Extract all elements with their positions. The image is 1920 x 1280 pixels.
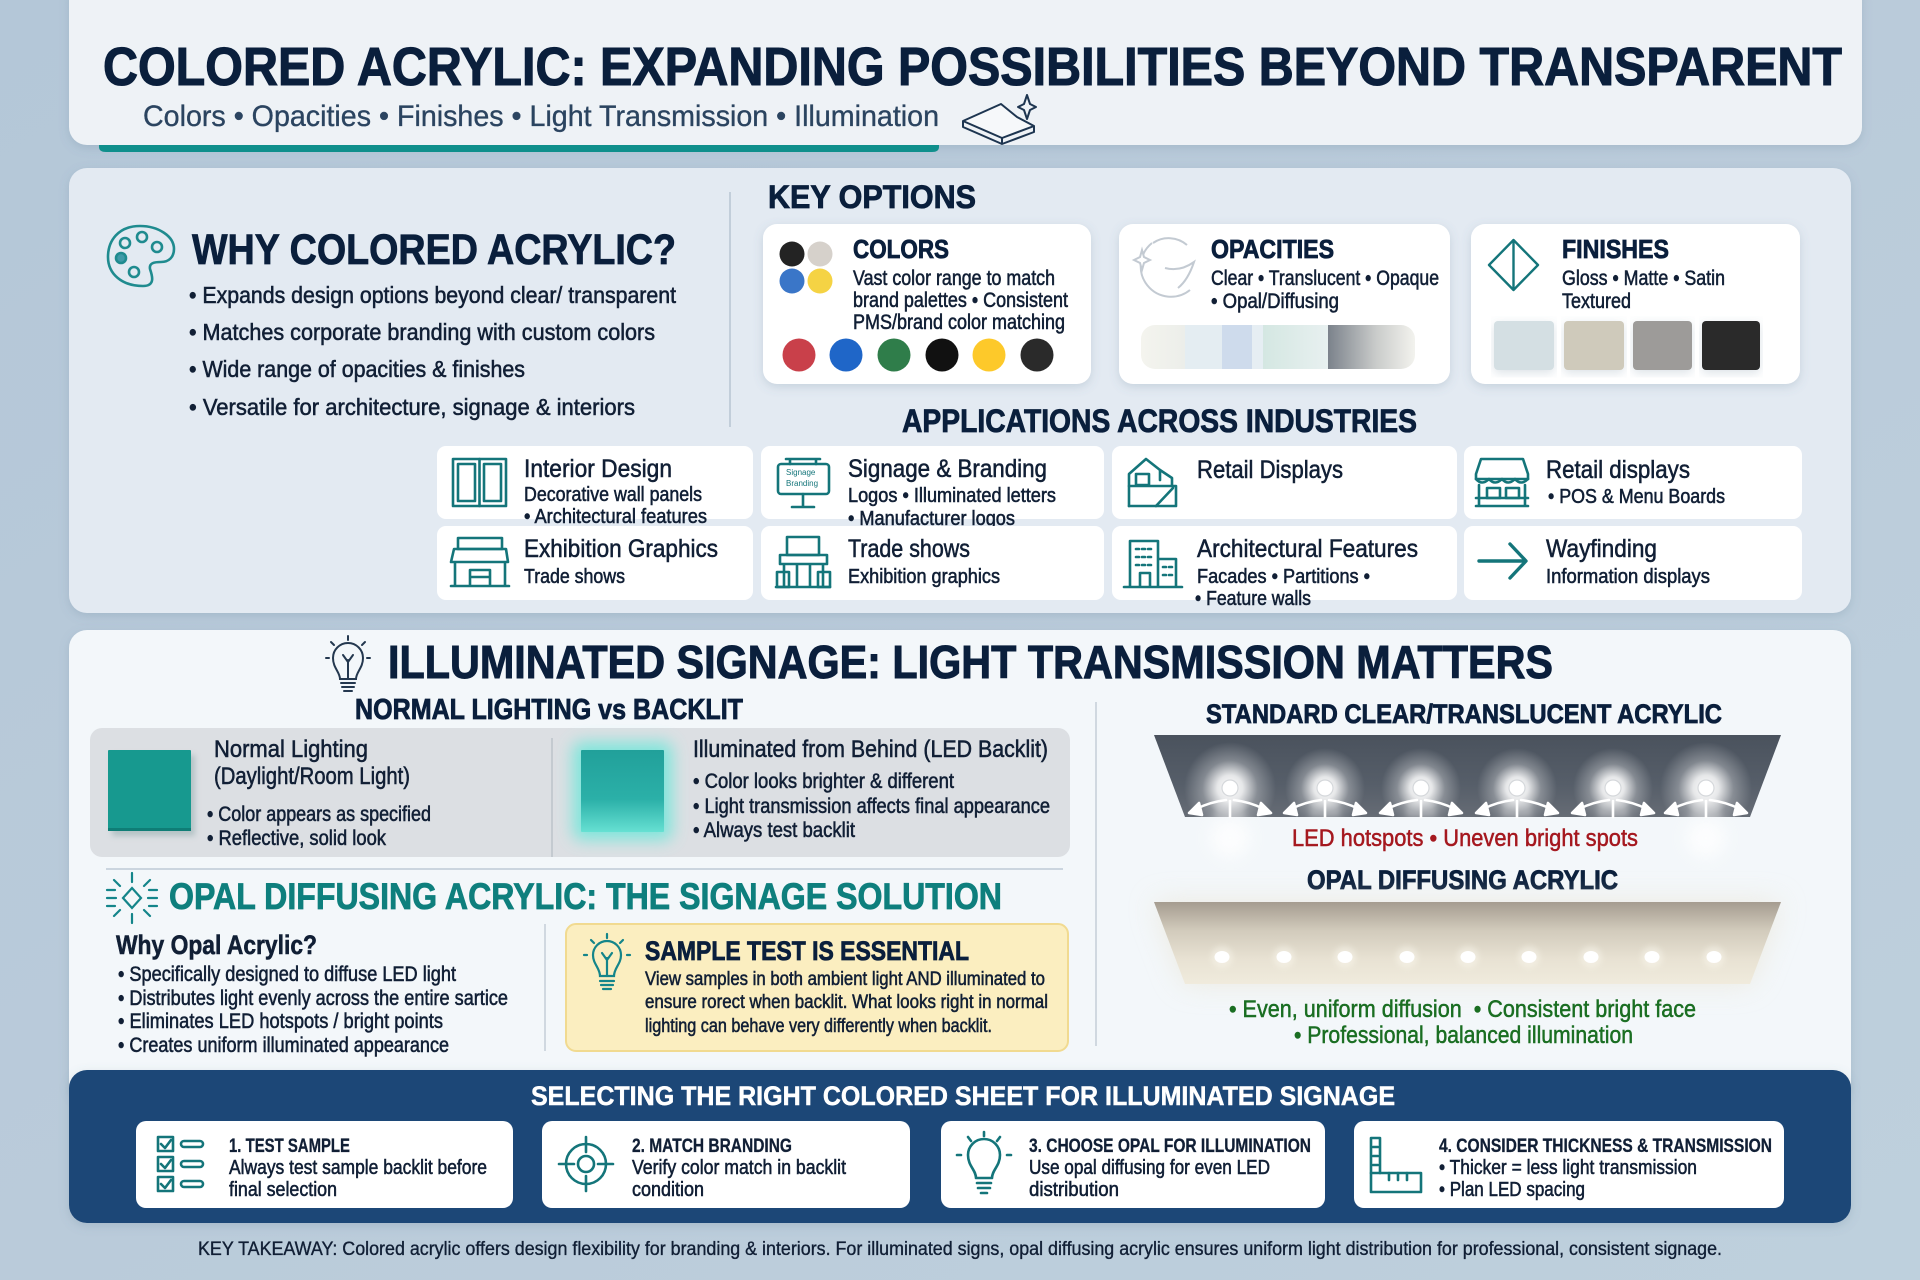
card: wayfinding [1464, 526, 1802, 600]
card: signage and branding [761, 446, 1104, 530]
step: thickness and transmission: • Thicker = less light transmission [1439, 1157, 1697, 1179]
swatch: normal lighting [108, 750, 195, 836]
card: retail displays pos: Retail displays [1546, 456, 1690, 484]
card: opacities: • Opal/Diffusing [1211, 290, 1339, 313]
card: finishes: Gloss • Matte • Satin [1562, 267, 1725, 290]
card: architectural features: Architectural Features [1197, 535, 1418, 563]
step: thickness and transmission: 4. CONSIDER THICKNESS & TRANSMISSION [1439, 1136, 1772, 1157]
diagram: opal diffusion panel [1154, 902, 1781, 984]
comparison: normal vs backlit: • Color looks brighter & different [693, 770, 954, 793]
card: interior design: • Architectural features [524, 506, 707, 528]
card: retail displays pos: • POS & Menu Boards [1548, 486, 1725, 508]
icon: opal sun [107, 873, 157, 923]
step: match branding: condition [632, 1179, 704, 1201]
caption: opal benefits: • Even, uniform diffusion • Consistent bright face [1229, 996, 1696, 1023]
key takeaway: KEY TAKEAWAY: Colored acrylic offers design flexibility for branding & interiors. For illuminated signs, opal diffusing acrylic ensures uniform light distribution for professional, consistent signage. [198, 1239, 1722, 1260]
card: retail displays pos [1464, 446, 1802, 519]
card: signage and branding: Branding [786, 479, 818, 488]
list: reasons: • Wide range of opacities & finishes [189, 356, 525, 382]
card: opacities: Clear • Translucent • Opaque [1211, 267, 1439, 290]
card: architectural features: Facades • Partitions • [1197, 566, 1370, 588]
comparison: normal vs backlit: Normal Lighting [214, 736, 368, 763]
card: colors: PMS/brand color matching [853, 311, 1065, 334]
step: choose opal: distribution [1029, 1179, 1119, 1201]
header panel [69, 0, 1862, 152]
heading: why colored acrylic: WHY COLORED ACRYLIC? [192, 226, 676, 274]
caption: opal benefits: • Professional, balanced illumination [1294, 1022, 1633, 1049]
card: retail displays [1112, 446, 1457, 519]
icon: light bulb [326, 636, 370, 691]
comparison: normal vs backlit: (Daylight/Room Light) [214, 763, 410, 790]
step: match branding [542, 1121, 910, 1208]
card: trade shows [761, 526, 1104, 600]
list: reasons: • Expands design options beyond clear/ transparent [189, 282, 677, 308]
step: thickness and transmission [1354, 1121, 1784, 1208]
heading: opal diffusing acrylic: OPAL DIFFUSING ACRYLIC: THE SIGNAGE SOLUTION [169, 876, 1002, 917]
card: opacities [1119, 224, 1450, 384]
step: thickness and transmission: • Plan LED spacing [1439, 1179, 1585, 1201]
text block: why opal acrylic [116, 930, 508, 1057]
step: match branding: 2. MATCH BRANDING [632, 1136, 792, 1157]
card: interior design: Interior Design [524, 455, 672, 483]
card: exhibition graphics: Trade shows [524, 566, 625, 588]
card: interior design [437, 446, 753, 528]
accent bar [99, 145, 939, 152]
card: architectural features: • Feature walls [1195, 588, 1311, 610]
card: signage and branding: • Manufacturer logos [848, 508, 1015, 530]
callout: sample test: SAMPLE TEST IS ESSENTIAL [645, 936, 969, 966]
heading: normal vs backlit: NORMAL LIGHTING vs BACKLIT [355, 694, 743, 726]
card: colors: Vast color range to match [853, 267, 1055, 290]
step: choose opal: Use opal diffusing for even LED [1029, 1157, 1270, 1179]
heading: opal acrylic: OPAL DIFFUSING ACRYLIC [1307, 865, 1618, 895]
callout: sample test: ensure rorect when backlit. What looks right in normal [645, 992, 1048, 1013]
callout: sample test: lighting can behave very differently when backlit. [645, 1016, 992, 1037]
icon: acrylic sheet [963, 95, 1036, 144]
step: choose opal: 3. CHOOSE OPAL FOR ILLUMINATION [1029, 1136, 1311, 1157]
heading: applications across industries: APPLICATIONS ACROSS INDUSTRIES [902, 403, 1417, 439]
text block: why opal acrylic: • Distributes light evenly across the entire sartice [118, 987, 508, 1010]
comparison: normal vs backlit [90, 728, 1070, 857]
step: test sample: Always test sample backlit before [229, 1157, 487, 1179]
card: colors: brand palettes • Consistent [853, 289, 1068, 312]
card: signage and branding: Signage [786, 468, 816, 477]
comparison: normal vs backlit: Illuminated from Behind (LED Backlit) [693, 736, 1048, 763]
step: test sample: 1. TEST SAMPLE [229, 1136, 350, 1157]
comparison: normal vs backlit: • Always test backlit [693, 819, 855, 842]
list: reasons [189, 282, 677, 420]
diagram: led hotspots panel [1154, 735, 1781, 858]
card: finishes: Textured [1562, 290, 1631, 313]
text block: why opal acrylic: • Creates uniform illuminated appearance [118, 1034, 449, 1057]
callout: sample test [566, 924, 1068, 1051]
card: trade shows: Exhibition graphics [848, 566, 1000, 588]
caption: opal benefits [1229, 996, 1696, 1049]
step: test sample: final selection [229, 1179, 337, 1201]
heading: illuminated signage: ILLUMINATED SIGNAGE: LIGHT TRANSMISSION MATTERS [388, 636, 1553, 688]
card: finishes: FINISHES [1562, 234, 1669, 264]
card: exhibition graphics [437, 526, 753, 600]
card: colors [763, 224, 1091, 384]
card: finishes [1471, 224, 1800, 384]
card: architectural features [1112, 526, 1457, 610]
card: exhibition graphics: Exhibition Graphics [524, 535, 718, 563]
icon: palette [108, 226, 174, 286]
list: reasons: • Matches corporate branding with custom colors [189, 319, 655, 345]
swatch: backlit [573, 742, 672, 840]
callout: sample test: View samples in both ambient light AND illuminated to [645, 969, 1045, 990]
text block: why opal acrylic: • Specifically designed to diffuse LED light [118, 963, 456, 986]
text block: why opal acrylic: • Eliminates LED hotspots / bright points [118, 1010, 443, 1033]
heading: standard acrylic: STANDARD CLEAR/TRANSLUCENT ACRYLIC [1206, 699, 1722, 729]
list: reasons: • Versatile for architecture, signage & interiors [189, 394, 635, 420]
panel: selecting the right sheet [69, 1070, 1851, 1223]
card: interior design: Decorative wall panels [524, 484, 702, 506]
card: colors: COLORS [853, 234, 949, 264]
comparison: normal vs backlit: • Light transmission affects final appearance [693, 795, 1050, 818]
card: signage and branding: Logos • Illuminated letters [848, 485, 1056, 507]
step: choose opal [941, 1121, 1325, 1208]
caption: hotspots: LED hotspots • Uneven bright spots [1292, 825, 1638, 852]
panel: illuminated signage [69, 630, 1851, 1100]
card: signage and branding: Signage & Branding [848, 455, 1047, 483]
heading: key options: KEY OPTIONS [768, 179, 976, 215]
card: retail displays: Retail Displays [1197, 456, 1343, 484]
subtitle: Colors • Opacities • Finishes • Light Transmission • Illumination [143, 100, 939, 133]
text block: why opal acrylic: Why Opal Acrylic? [116, 930, 317, 960]
card: wayfinding: Wayfinding [1546, 535, 1657, 563]
card: trade shows: Trade shows [848, 535, 970, 563]
panel: why colored acrylic and key options [69, 168, 1851, 613]
heading: selecting sheet: SELECTING THE RIGHT COLORED SHEET FOR ILLUMINATED SIGNAGE [531, 1081, 1395, 1111]
step: test sample [136, 1121, 513, 1208]
card: wayfinding: Information displays [1546, 566, 1710, 588]
comparison: normal vs backlit: • Color appears as specified [207, 803, 431, 826]
comparison: normal vs backlit: • Reflective, solid look [207, 827, 386, 850]
card: opacities: OPACITIES [1211, 234, 1334, 264]
step: match branding: Verify color match in backlit [632, 1157, 846, 1179]
